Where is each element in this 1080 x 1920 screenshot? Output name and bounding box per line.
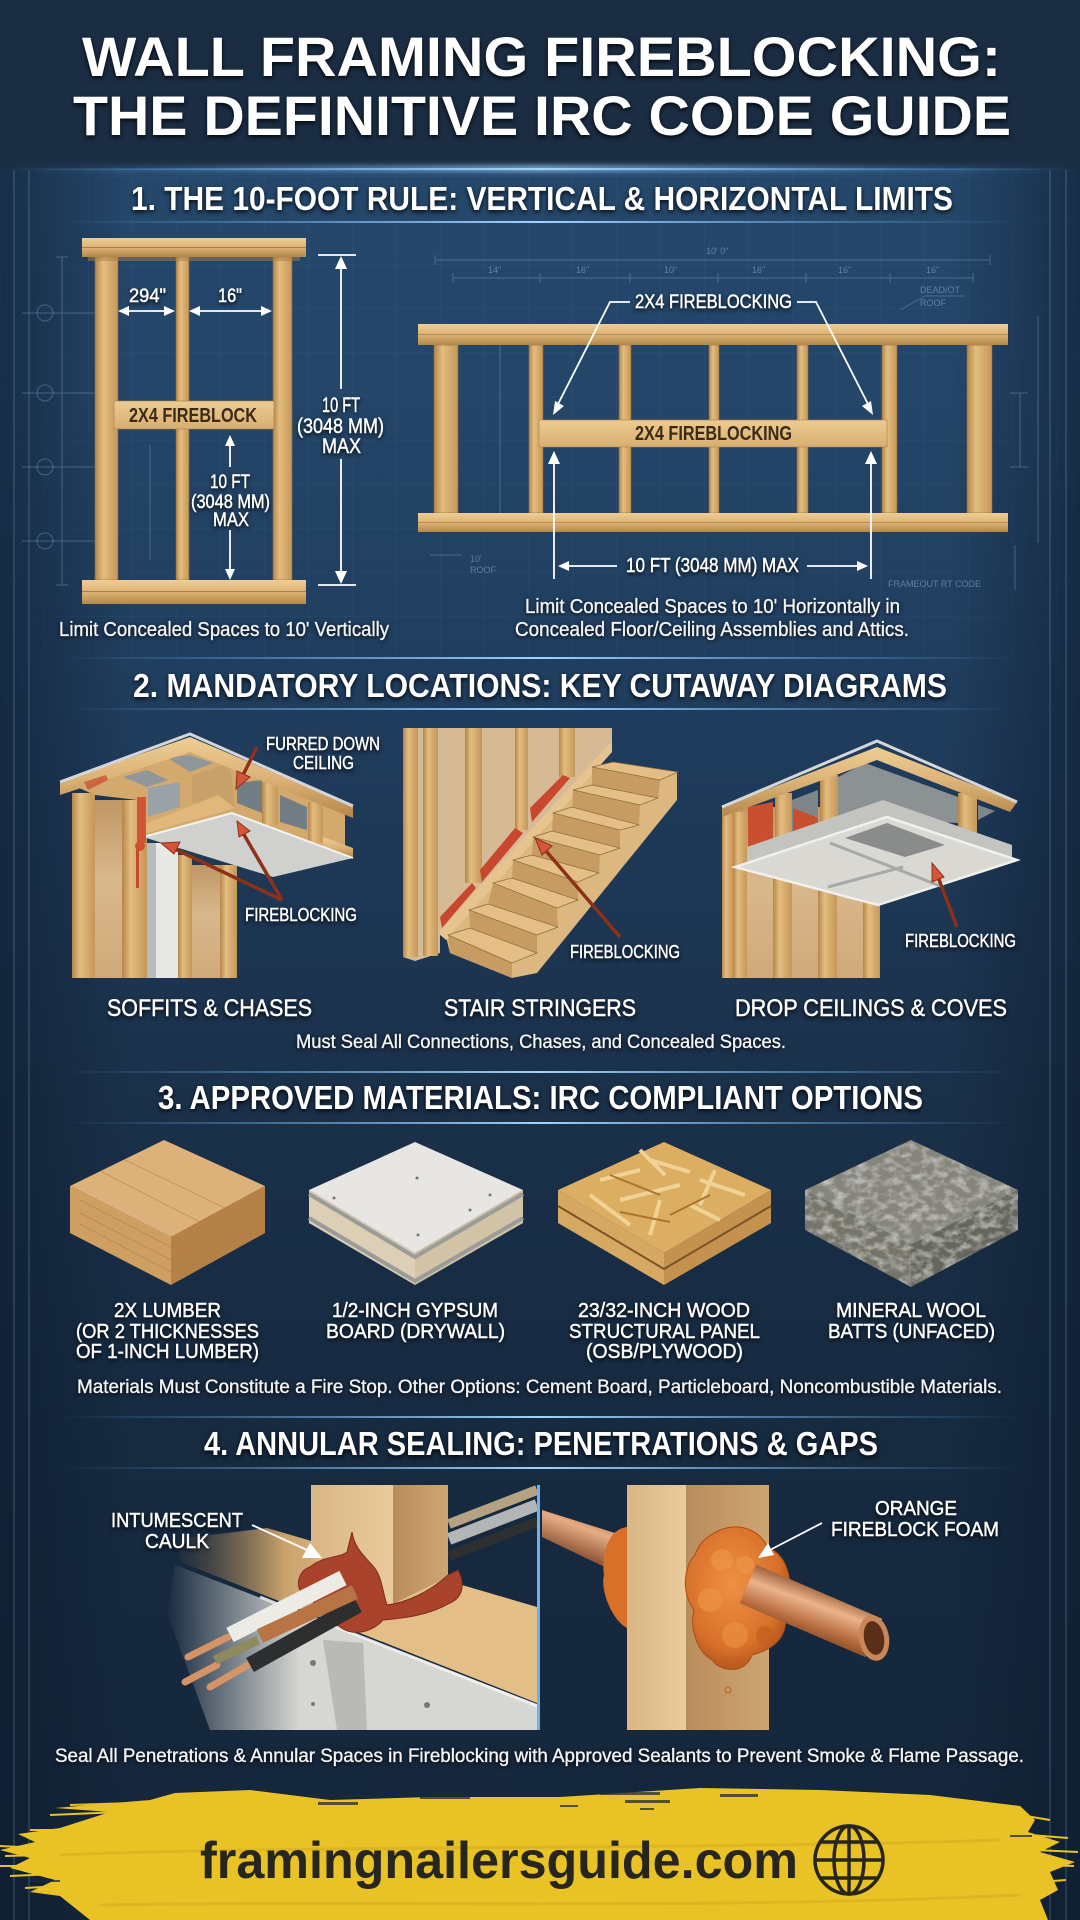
- label: intumescent caulk: CAULK: [145, 1531, 210, 1553]
- label: mineral wool: BATTS (UNFACED): [828, 1321, 995, 1343]
- label: wood panel: [569, 1300, 760, 1363]
- faint blueprint dimensions: ROOF: [470, 565, 497, 575]
- faint blueprint dimensions: ROOF: [920, 298, 947, 308]
- copper pipe: [748, 1584, 893, 1663]
- title: THE DEFINITIVE IRC CODE GUIDE: [73, 84, 1011, 147]
- website url: framingnailersguide.com: [200, 1832, 798, 1890]
- horizontal limit dimension: [548, 451, 877, 579]
- section 2: mandatory locations: [60, 657, 1020, 1053]
- stud spacing dimensions: 294": [129, 286, 166, 307]
- illustration: caulked cables: [167, 1485, 540, 1730]
- top leader callout: [553, 292, 873, 415]
- label: lumber: [76, 1300, 259, 1363]
- inner height dimension: 10 FT: [210, 472, 250, 493]
- faint blueprint dimensions: 10' 0": [706, 246, 728, 256]
- label: orange fireblock foam: [758, 1498, 999, 1558]
- label: lumber: OF 1-INCH LUMBER): [76, 1341, 259, 1363]
- material: lumber cube: [70, 1140, 265, 1285]
- label: fireblocking ceiling: FIREBLOCKING: [905, 931, 1016, 951]
- title: WALL FRAMING FIREBLOCKING:: [82, 25, 1001, 88]
- fireblock board: 2X4 FIREBLOCK: [129, 405, 257, 427]
- label: gypsum: BOARD (DRYWALL): [326, 1321, 505, 1343]
- fireblock board: [114, 401, 274, 429]
- heading 2: 2. MANDATORY LOCATIONS: KEY CUTAWAY DIAGRAMS: [133, 667, 947, 704]
- horizontal limit dimension: 10 FT (3048 MM) MAX: [626, 555, 799, 577]
- label: intumescent caulk: INTUMESCENT: [111, 1510, 243, 1532]
- top leader callout: 2X4 FIREBLOCKING: [635, 292, 792, 313]
- stair treads: [448, 762, 678, 963]
- label: wood panel: 23/32-INCH WOOD: [578, 1300, 750, 1322]
- section 4: annular sealing: [55, 1416, 1024, 1767]
- title: [73, 25, 1011, 147]
- cutaway: stair: [403, 728, 680, 978]
- illustration: copper pipe with foam: [542, 1485, 893, 1730]
- caption horizontal: Limit Concealed Spaces to 10' Horizontally in: [525, 596, 900, 618]
- label: mineral wool: [828, 1300, 995, 1343]
- overall height dimension: [297, 255, 384, 585]
- caption: drop ceilings: DROP CEILINGS & COVES: [735, 995, 1007, 1022]
- overall height dimension: 10 FT: [322, 394, 360, 417]
- inner height dimension: MAX: [213, 510, 249, 531]
- left vertical wall frame: [82, 238, 306, 604]
- caption vertical: Limit Concealed Spaces to 10' Vertically: [59, 619, 389, 641]
- red fireblock strips: [440, 775, 570, 928]
- heading 4: 4. ANNULAR SEALING: PENETRATIONS & GAPS: [204, 1425, 878, 1462]
- material: mineral wool cube: [805, 1140, 1018, 1287]
- faint blueprint dimensions: 16": [926, 265, 939, 275]
- section 4 note: Seal All Penetrations & Annular Spaces in Fireblocking with Approved Sealants to Prevent Smoke & Flame Passage.: [55, 1746, 1024, 1767]
- faint blueprint dimensions: DEAD/OT: [920, 285, 961, 295]
- label: gypsum: [326, 1300, 505, 1343]
- section 3: approved materials: [60, 1071, 1020, 1398]
- cutaway: drop ceiling: [722, 741, 1017, 978]
- label: fireblocking stair: FIREBLOCKING: [570, 942, 680, 962]
- red arrow: ceiling: [932, 863, 957, 927]
- heading 1: 1. THE 10-FOOT RULE: VERTICAL & HORIZONTAL LIMITS: [131, 180, 953, 217]
- stud spacing dimensions: 16": [218, 286, 242, 307]
- cutaway: soffit: [60, 734, 380, 978]
- section 3 note: Materials Must Constitute a Fire Stop. Other Options: Cement Board, Particleboard, Noncombustible Materials.: [77, 1377, 1002, 1398]
- footer brush stroke: [0, 1788, 1078, 1920]
- material: OSB cube: [558, 1142, 771, 1285]
- faint blueprint dimensions: 16": [838, 265, 851, 275]
- inner height dimension: (3048 MM): [191, 492, 270, 513]
- faint blueprint dimensions: [22, 246, 1038, 590]
- label: orange fireblock foam: FIREBLOCK FOAM: [831, 1519, 999, 1541]
- faint blueprint dimensions: 16": [752, 265, 765, 275]
- label: lumber: (OR 2 THICKNESSES: [76, 1321, 259, 1343]
- intumescent caulk: [298, 1532, 462, 1632]
- overall height dimension: (3048 MM): [297, 415, 384, 438]
- red arrows: soffit: [161, 747, 282, 900]
- label: lumber: 2X LUMBER: [114, 1300, 221, 1322]
- faint blueprint dimensions: 14": [488, 265, 501, 275]
- caption: soffits: SOFFITS & CHASES: [107, 995, 312, 1022]
- fireblocking board: 2X4 FIREBLOCKING: [635, 423, 792, 445]
- label: furred down ceiling: FURRED DOWN: [266, 734, 380, 754]
- stud spacing dimensions: [118, 286, 272, 316]
- label: intumescent caulk: [111, 1510, 322, 1558]
- faint blueprint dimensions: 10": [664, 265, 677, 275]
- lower cables: [185, 1578, 358, 1687]
- label: gypsum: 1/2-INCH GYPSUM: [332, 1300, 498, 1322]
- label: furred down ceiling: CEILING: [293, 753, 354, 773]
- orange foam: [685, 1527, 790, 1670]
- faint blueprint dimensions: FRAMEOUT RT CODE: [888, 579, 981, 589]
- caption horizontal: [515, 596, 909, 641]
- label: orange fireblock foam: ORANGE: [875, 1498, 957, 1520]
- caption: stair: STAIR STRINGERS: [444, 995, 636, 1022]
- caption horizontal: Concealed Floor/Ceiling Assemblies and Attics.: [515, 619, 909, 641]
- section 1: the 10-foot rule: [22, 180, 1038, 641]
- stair risers: [448, 767, 660, 978]
- wood post: [311, 1485, 448, 1604]
- fireblocking board: [539, 420, 887, 447]
- label: furred down ceiling: [266, 734, 380, 773]
- heading 3: 3. APPROVED MATERIALS: IRC COMPLIANT OPTIONS: [158, 1079, 923, 1116]
- right horizontal frame: [418, 292, 1008, 579]
- material: gypsum cube: [309, 1142, 523, 1285]
- faint blueprint dimensions: 16": [576, 265, 589, 275]
- label: wood panel: STRUCTURAL PANEL: [569, 1321, 760, 1343]
- faint blueprint dimensions: 10': [470, 554, 482, 564]
- upper cables: [449, 1490, 537, 1556]
- overall height dimension: MAX: [322, 435, 361, 458]
- label: fireblocking soffit: FIREBLOCKING: [245, 905, 357, 925]
- label: mineral wool: MINERAL WOOL: [836, 1300, 986, 1322]
- icon: globe: [815, 1826, 883, 1894]
- red arrow: stair: [535, 838, 620, 937]
- section 2 note: Must Seal All Connections, Chases, and Concealed Spaces.: [296, 1032, 786, 1053]
- label: wood panel: (OSB/PLYWOOD): [586, 1341, 743, 1363]
- inner height dimension: [191, 435, 270, 580]
- header band: [0, 0, 1080, 171]
